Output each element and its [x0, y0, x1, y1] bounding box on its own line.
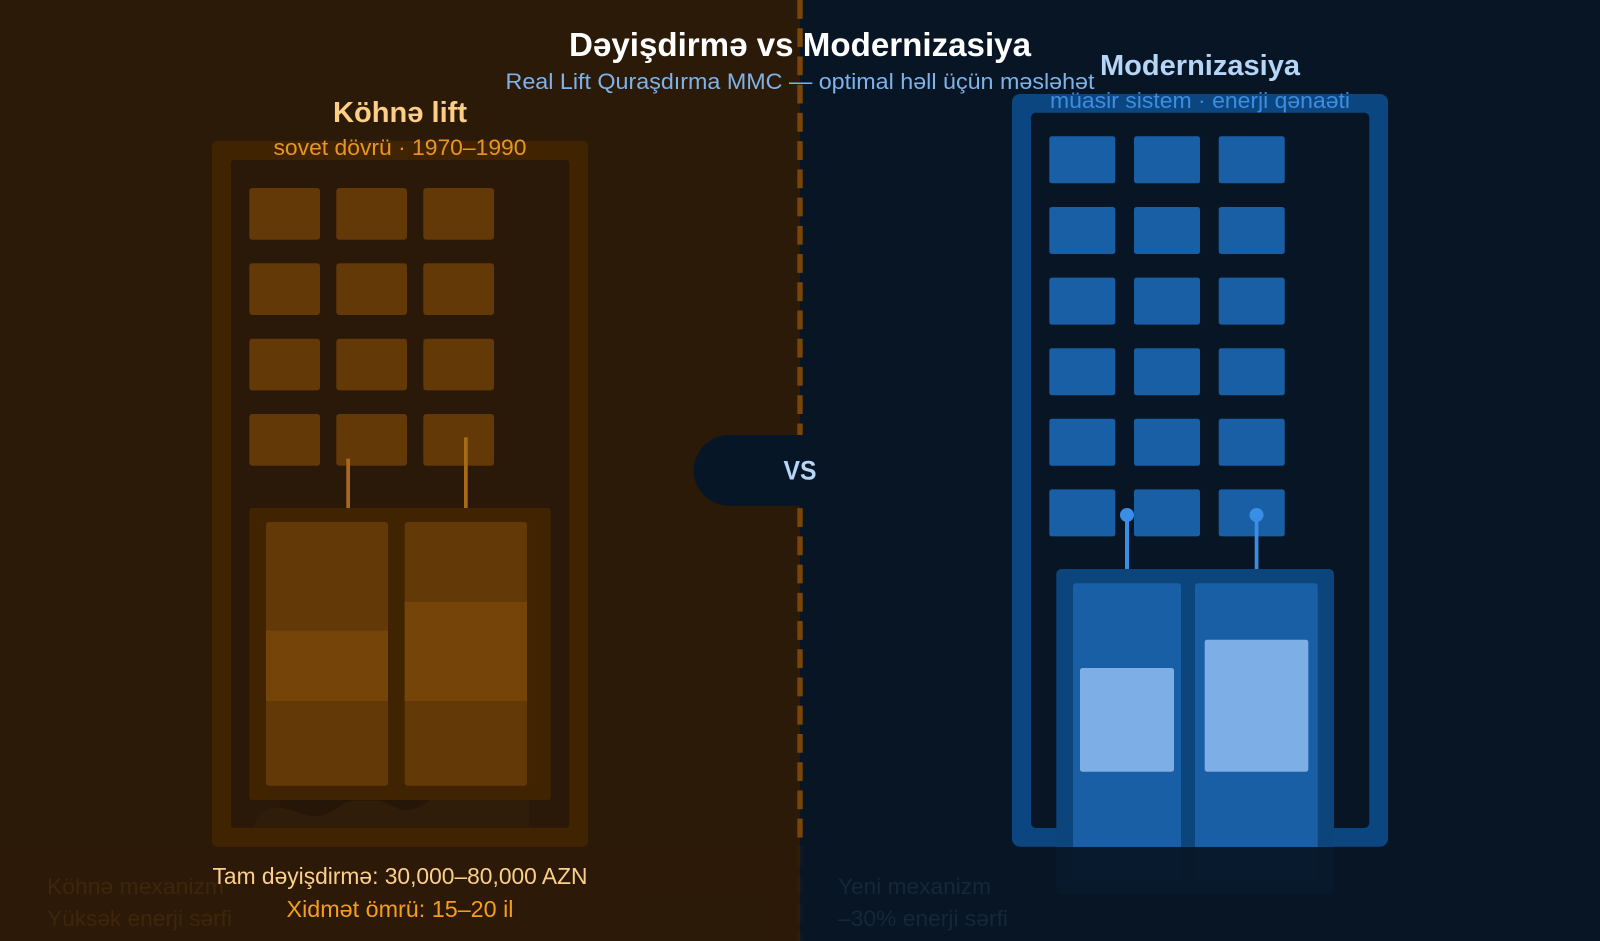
- lift shaft panel: [249, 508, 551, 800]
- bottom fade right: [800, 847, 1600, 941]
- right heading: Modernizasiya: [1100, 50, 1301, 82]
- left lift cable: [346, 459, 350, 508]
- faint left mechanism note: Köhnə mexanizm: [47, 874, 224, 899]
- building frame: [212, 141, 588, 847]
- left subheading: sovet dövrü · 1970–1990: [274, 135, 526, 160]
- subtitle: Real Lift Quraşdırma MMC — optimal həll üçün məsləhət: [506, 69, 1094, 94]
- left cable with sensor: [1120, 508, 1134, 569]
- panel: left background: [0, 0, 800, 941]
- left cabin: [266, 631, 388, 701]
- building frame: [1012, 94, 1388, 847]
- right cable with sensor: [1250, 508, 1264, 569]
- lift shaft panel: [1056, 569, 1334, 894]
- building interior: [231, 160, 569, 828]
- faint right mechanism note: –30% enerji sərfi: [838, 906, 1008, 931]
- badge cover over divider, right half: [800, 435, 805, 506]
- left heading: Köhnə lift: [333, 97, 467, 129]
- title: Dəyişdirmə vs Modernizasiya: [569, 26, 1032, 63]
- right lift cable: [464, 437, 468, 508]
- window grid: [1049, 136, 1285, 536]
- shadow gap above rust stain: [280, 800, 430, 818]
- left door: [1073, 583, 1181, 880]
- right building: modernized lift: [1012, 94, 1388, 894]
- vs badge: [694, 435, 800, 506]
- building interior: [1031, 113, 1369, 828]
- right cabin: [1205, 640, 1308, 772]
- bottom fade left: [0, 847, 800, 941]
- right door: [405, 522, 527, 786]
- faint right mechanism note: [838, 874, 1008, 931]
- faint right mechanism note: Yeni mexanizm: [838, 874, 991, 899]
- badge pill: [694, 435, 800, 506]
- lifespan line: Xidmət ömrü: 15–20 il: [286, 896, 514, 922]
- badge cover over divider, left half: [796, 435, 800, 506]
- right subheading: müasir sistem · enerji qənaəti: [1050, 88, 1350, 113]
- left building: old lift: [212, 141, 588, 847]
- window grid: [249, 188, 494, 466]
- panel: right background: [800, 0, 1600, 941]
- left cabin: [1080, 668, 1174, 772]
- left door: [266, 522, 388, 786]
- faint left mechanism note: Yüksək enerji sərfi: [47, 906, 232, 931]
- faint left mechanism note: [47, 874, 232, 931]
- center dashed divider: [797, 0, 803, 941]
- right cabin: [405, 602, 527, 701]
- vs label: VS: [784, 456, 816, 486]
- cost line: Tam dəyişdirmə: 30,000–80,000 AZN: [212, 863, 588, 889]
- rust stain at building base: [254, 800, 529, 828]
- right door: [1195, 583, 1318, 880]
